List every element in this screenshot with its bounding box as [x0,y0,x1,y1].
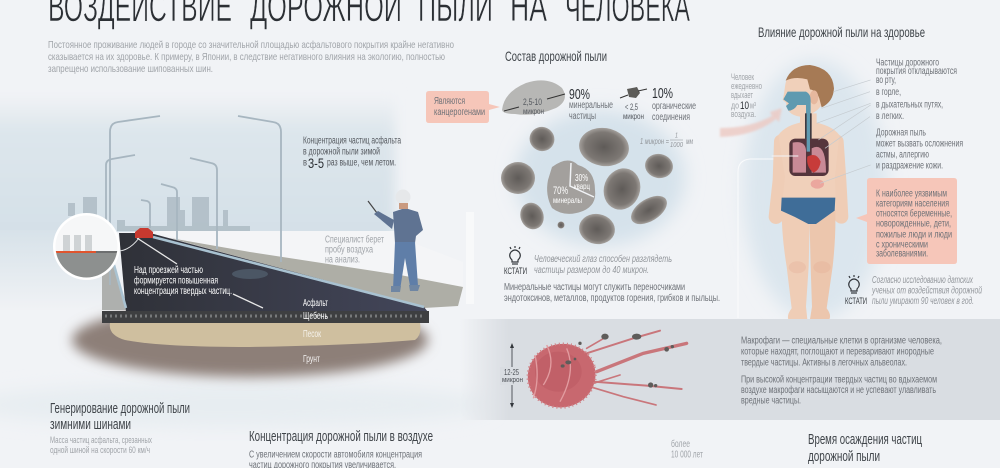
large mineral particle [502,80,565,116]
heading: winter tyres: одной шиной на скорости 60 км/ч [50,445,150,455]
panel bracket [738,159,790,318]
car [135,228,153,238]
road labels: Щебень [303,310,328,322]
callout: carcinogens: Являются [434,96,465,107]
heading: Состав дорожной пыли [505,48,607,64]
text: deposits: во рту, [876,75,896,86]
blue haze [743,60,887,320]
bottom fog [0,383,490,427]
stat: 10 percent: 10% [652,85,673,102]
text: specialist: Специалист берет [325,234,384,246]
road labels: Над проезжей частью [134,265,203,276]
text: air inhaled: ежедневно [731,81,762,91]
fact: Danish study [871,275,982,307]
callout: vulnerable groups: К наиболее уязвимым [876,188,947,200]
heading: winter tyres: Генерирование дорожной пыли [50,400,190,417]
band [460,319,1000,420]
stat: 90 percent: 90% [569,86,590,103]
left fade below the horizon [0,230,102,310]
text: deposits: в легких. [876,111,904,122]
arms [776,142,841,217]
text: winter concentration: Концентрация частиц асфальта [303,134,401,146]
road labels: Песок [303,329,321,340]
heading: winter tyres: зимними шинами [50,416,131,433]
heading: settling time [808,431,922,465]
size arrow: 12-25 [504,367,519,377]
text: air inhaled: Человек [731,72,754,82]
particles [501,123,675,247]
callout: vulnerable groups: заболеваниями. [876,248,928,260]
stat: 90 percent: минеральные [569,100,613,111]
label: over 10000 years [671,438,703,460]
text: macrophage description: твердые частицы. Активны в легочных альвеолах. [741,358,907,368]
inset circle: tyre and road [50,212,139,283]
snow [153,231,463,306]
heading: settling time: дорожной пыли [808,448,880,465]
stat: 10 percent [652,85,696,123]
skin irritation [811,179,824,189]
heading: winter tyres [50,400,190,455]
text: winter concentration: раз выше, чем летом. [327,158,396,168]
text: mineral carriers: эндотоксинов, металлов, продуктов горения, грибков и пыльцы. [504,292,720,304]
lungs [789,139,829,176]
callout: vulnerable groups [856,178,957,264]
text: winter concentration: в [303,158,307,168]
heading: concentration in the air [249,428,433,468]
illustration: child [772,65,871,319]
pie particle: quartz and minerals [547,160,595,214]
illustration: macrophage cell [521,331,687,415]
intro text [48,39,454,75]
text: winter concentration: в дорожной пыли зимой [303,146,380,158]
legs [782,210,810,319]
micron definition: 1 микрон = [640,137,669,146]
micron definition: мм [686,137,693,146]
inhalation arrow [720,108,782,137]
pointer lines [772,80,871,183]
heading: concentration in the air: С увеличением скорости автомобиля концентрация [249,448,422,460]
text: deposits: покрытия откладываются [876,66,957,77]
callout: carcinogens: канцерогенами [434,107,485,118]
small organic particle: микрон [623,111,644,121]
blue haze [515,110,685,246]
stat: 90 percent [569,86,613,122]
intro text: запрещено использование шипованных шин. [48,63,213,75]
large mineral particle: 2,5-10 [523,97,542,107]
title [48,0,690,30]
text: winter concentration: 3-5 [308,155,324,171]
large mineral particle: микрон [523,106,544,116]
stat: 90 percent: частицы [569,111,596,122]
pie particle: quartz and minerals: минералы [553,195,582,205]
text: deposits: Частицы дорожного [876,58,939,68]
road surface [119,233,428,312]
intro text: Постоянное проживание людей в городе со значительной площадью асфальтового покрытия крайне негативно [48,39,454,51]
text: air inhaled: вдыхает [731,90,753,100]
text: air inhaled: 10 [740,100,749,112]
callout: vulnerable groups: с хроническими [876,240,928,250]
stat: 10 percent: соединения [652,112,690,123]
intro text: сказывается на их здоровье. К примеру, в Японии, в следствие негативного влияния на экологию, полностью [48,51,445,63]
text: mineral carriers [504,282,720,304]
micron definition: 1000 [670,142,683,149]
size arrow: микрон [502,377,523,384]
text: air inhaled: до [731,100,739,110]
callout: vulnerable groups: относятся беременные, [876,208,952,220]
pie particle: quartz and minerals: 30% [575,173,588,184]
heading: settling time: Время осаждения частиц [808,431,922,448]
text: mineral carriers: Минеральные частицы могут служить переносчиками [504,282,685,293]
heading: concentration in the air: Концентрация дорожной пыли в воздухе [249,428,433,445]
road labels: формируется повышенная [134,274,218,286]
text: deposits [876,58,963,172]
pavement [170,238,463,308]
text: winter concentration [303,134,401,171]
heading: Влияние дорожной пыли на здоровье [758,24,925,40]
road labels [134,265,328,365]
callout: carcinogens [426,91,500,123]
size arrow [500,343,524,408]
underwear [781,198,835,224]
city skyline [68,197,250,231]
fact: human eye [534,253,672,276]
text: deposits: астмы, аллергию [876,150,929,160]
small organic particle [620,87,647,121]
panel: macrophages [460,319,1000,420]
callout: vulnerable groups: новорожденные, дети, [876,218,951,230]
hair [786,65,834,107]
text: deposits: в горле, [876,87,901,98]
label: by the way: КСТАТИ [845,296,867,306]
text: macrophage description [741,334,942,406]
label: over 10000 years: 10 000 лет [671,450,703,460]
head [783,66,831,117]
text: deposits: в дыхательных путях, [876,100,943,110]
fact: human eye: Человеческий глаз способен разглядеть [534,253,672,265]
airway [783,92,811,120]
callout: vulnerable groups: пожилые люди и люди [876,230,952,240]
text: specialist [325,234,384,266]
text: macrophage description: вредные частицы. [741,396,801,406]
soil layer [72,303,428,377]
road scene illustration [0,95,490,427]
pie particle: quartz and minerals: кварц [574,182,590,191]
text: specialist: на анализ. [325,254,360,266]
fact: human eye: частицы размером до 40 микрон. [534,265,649,276]
icon: light bulb [849,275,859,293]
icon: light bulb [510,246,520,264]
stat: 10 percent: органические [652,101,696,112]
label: by the way: КСТАТИ [504,266,527,276]
pie particle: quartz and minerals: 70% [553,185,568,197]
callout: vulnerable groups: категориям населения [876,198,949,210]
specialist figure [368,190,423,292]
text: deposits: Дорожная пыль [876,128,926,138]
panel: dust composition [426,48,720,304]
road labels: концентрация твердых частиц. [134,286,232,297]
text: macrophage description: которые находят, поглощают и переваривают инородные [741,346,934,358]
text: air inhaled [731,72,762,119]
large pale pole [466,212,474,304]
road labels: Асфальт [303,297,328,309]
road labels: Грунт [303,354,320,365]
micron definition: 1 [675,132,678,140]
text: deposits: и раздражение кожи. [876,160,943,172]
heading: winter tyres: Масса частиц асфальта, срезанных [50,435,152,445]
panel: health effects [720,24,982,320]
sand layer [110,323,420,347]
street lamps [106,116,281,285]
sky [0,110,398,232]
gravel layer [102,311,429,323]
text: air inhaled: воздуха. [731,109,756,119]
small organic particle: < 2,5 [625,102,638,112]
text: air inhaled: м³ [750,100,756,110]
text: specialist: пробу воздуха [325,244,373,256]
torso [778,113,839,210]
micron definition [640,132,693,149]
label: over 10000 years: более [671,438,690,450]
